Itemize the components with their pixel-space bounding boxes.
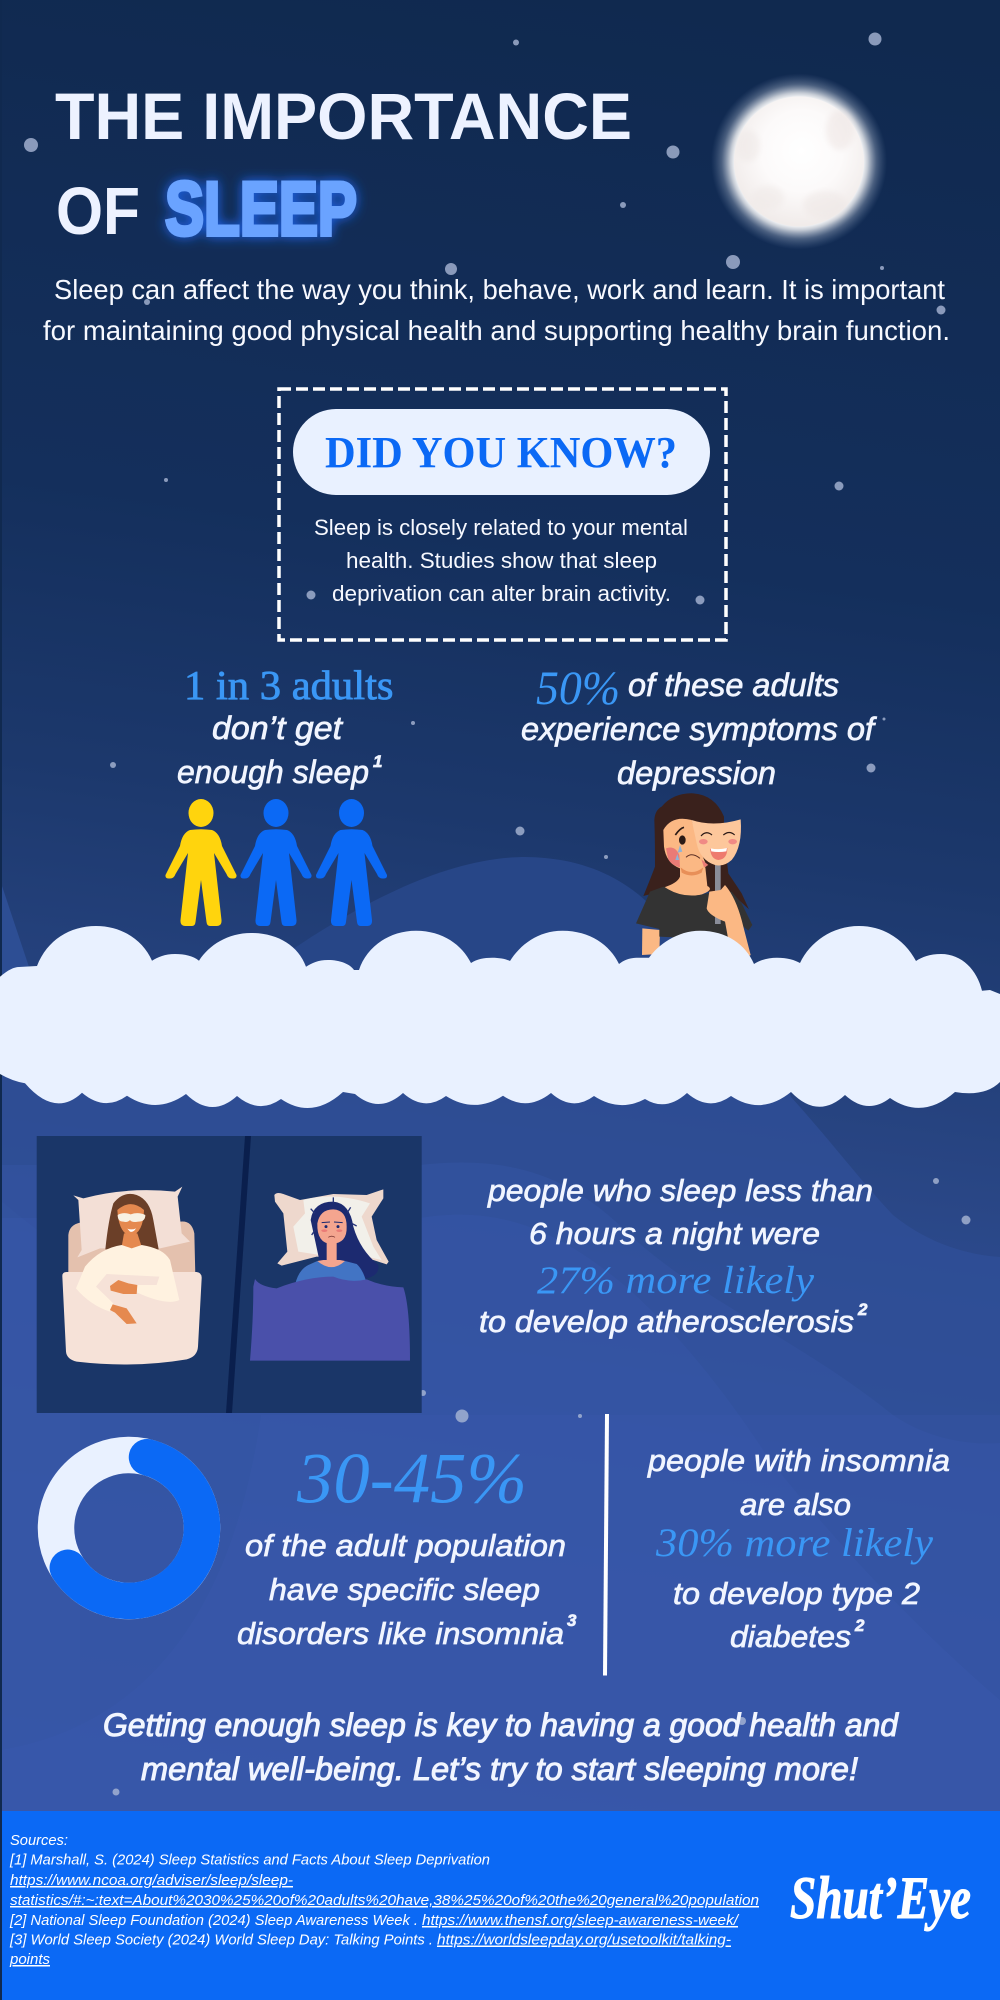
title: THE IMPORTANCE	[55, 79, 632, 153]
did you know text: deprivation can alter brain activity.	[332, 581, 671, 606]
icon: three people	[165, 799, 387, 926]
sources	[9, 1832, 759, 1968]
title: SLEEP	[165, 167, 357, 252]
person blue	[240, 799, 312, 926]
panel: footer	[2, 1811, 1000, 2000]
stat: 1 in 3 adults: 1	[373, 752, 382, 771]
stat: 50% of these adults	[521, 662, 877, 791]
stat: 1 in 3 adults: enough sleep	[177, 754, 369, 790]
did you know text	[314, 515, 688, 606]
text: diabetes stat: people with insomnia	[647, 1443, 950, 1478]
sources: [2] National Sleep Foundation (2024) Sleep Awareness Week .	[9, 1912, 418, 1929]
sources: https://www.ncoa.org/adviser/sleep/sleep-	[10, 1872, 293, 1889]
icon: woman sleeping with eye mask	[62, 1187, 202, 1365]
text: atherosclerosis stat: to develop atherosclerosis	[479, 1304, 854, 1339]
title: OF	[56, 174, 140, 249]
text: atherosclerosis stat: 27% more likely	[537, 1259, 815, 1302]
stat: 50% of these adults: of these adults	[628, 667, 839, 703]
sources: [1] Marshall, S. (2024) Sleep Statistics and Facts About Sleep Deprivation	[9, 1852, 490, 1868]
intro paragraph	[43, 274, 950, 346]
text: sleep disorders stat	[237, 1438, 577, 1651]
closing statement: Getting enough sleep is key to having a good health and	[103, 1707, 899, 1743]
text: diabetes stat: diabetes	[730, 1619, 851, 1654]
closing statement: mental well-being. Let’s try to start sleeping more!	[141, 1751, 858, 1787]
sources: [3] World Sleep Society (2024) World Sleep Day: Talking Points .	[9, 1932, 433, 1948]
icon: woman awake in bed	[250, 1189, 410, 1361]
text: atherosclerosis stat	[479, 1173, 873, 1339]
sources: points	[9, 1951, 50, 1968]
person blue	[316, 799, 387, 926]
icon: woman holding happy mask	[636, 793, 752, 967]
stat: 50% of these adults: experience symptoms of	[521, 711, 877, 747]
did you know text: Sleep is closely related to your mental	[314, 515, 688, 540]
pill heading: DID YOU KNOW?	[325, 428, 677, 477]
sources: https://worldsleepday.org/usetoolkit/talking-	[437, 1932, 731, 1948]
sources: https://www.thensf.org/sleep-awareness-week/	[422, 1912, 740, 1929]
closing statement	[103, 1707, 899, 1787]
text: atherosclerosis stat: 6 hours a night were	[529, 1216, 820, 1251]
stat: 1 in 3 adults: don’t get	[212, 710, 343, 746]
moon	[711, 74, 887, 250]
stat: 50% of these adults: 50%	[536, 662, 620, 715]
text: sleep disorders stat: have specific sleep	[269, 1572, 540, 1607]
panel: sleeping illustrations	[37, 1136, 422, 1413]
text: atherosclerosis stat: 2	[857, 1300, 868, 1319]
text: diabetes stat	[647, 1443, 950, 1654]
text: diabetes stat: 2	[854, 1616, 865, 1635]
sources: Sources:	[10, 1832, 68, 1849]
vertical divider	[605, 1414, 607, 1676]
stat: 1 in 3 adults: 1 in 3 adults	[184, 662, 394, 708]
did you know text: health. Studies show that sleep	[346, 548, 657, 573]
text: diabetes stat: 30% more likely	[655, 1520, 933, 1565]
text: sleep disorders stat: of the adult population	[245, 1528, 566, 1563]
text: atherosclerosis stat: people who sleep less than	[487, 1173, 873, 1208]
text: diabetes stat: to develop type 2	[673, 1576, 920, 1611]
donut chart: 30-45%	[56, 1455, 202, 1601]
pill heading	[293, 409, 710, 495]
text: sleep disorders stat: 3	[567, 1611, 577, 1630]
panel: did you know	[279, 389, 726, 640]
stat: 50% of these adults: depression	[617, 755, 776, 791]
text: diabetes stat: are also	[740, 1487, 851, 1522]
sources: statistics/#:~:text=About%2030%25%20of%20adults%20have,38%25%20of%20the%20general%20population	[10, 1892, 759, 1909]
person yellow	[165, 799, 237, 926]
title	[55, 79, 632, 252]
cloud	[0, 926, 1000, 1108]
text: sleep disorders stat: disorders like insomnia	[237, 1616, 564, 1651]
text: sleep disorders stat: 30-45%	[296, 1438, 527, 1518]
intro paragraph: for maintaining good physical health and supporting healthy brain function.	[43, 315, 950, 346]
intro paragraph: Sleep can affect the way you think, behave, work and learn. It is important	[54, 274, 945, 305]
stat: 1 in 3 adults	[177, 662, 394, 790]
